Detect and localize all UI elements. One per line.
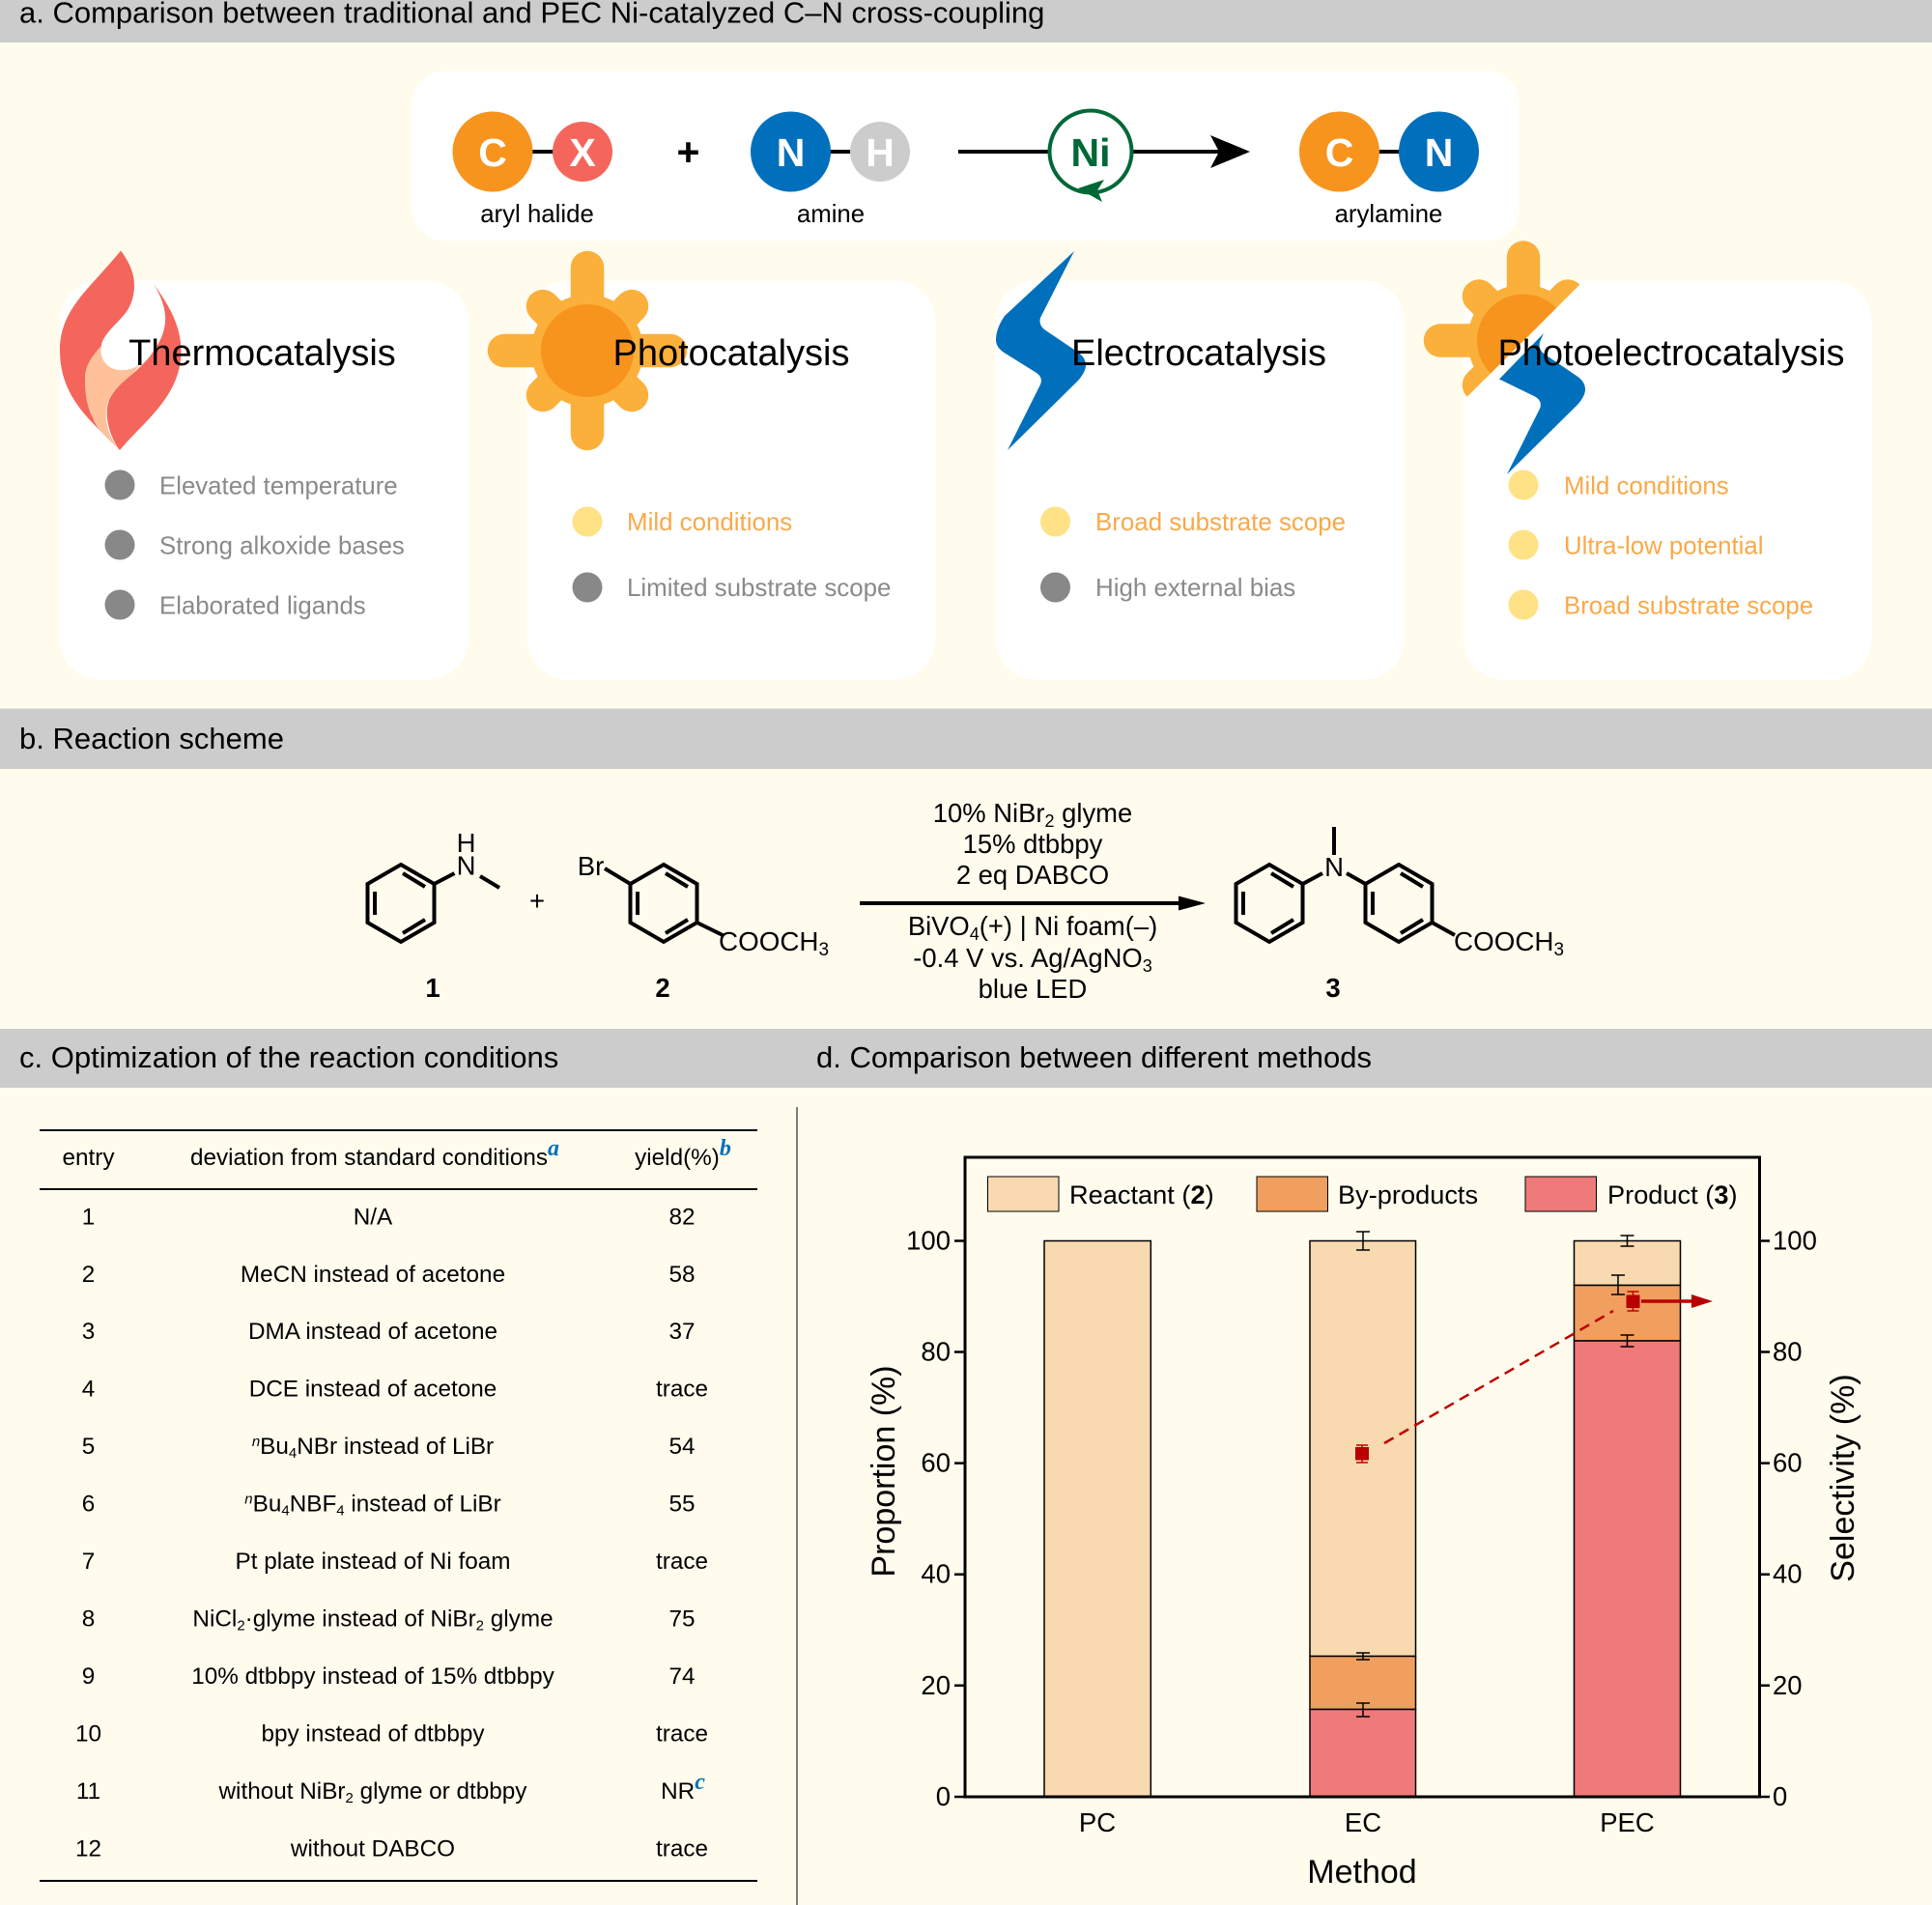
x axis labels: [1079, 1807, 1655, 1837]
table rows: 74: [668, 1663, 696, 1690]
compound 2: 3: [818, 940, 829, 960]
table rows: 5: [82, 1434, 95, 1460]
table rows: 10: [75, 1721, 101, 1747]
header a: [0, 0, 1932, 43]
table rows: trace: [656, 1376, 708, 1403]
table head: [62, 1136, 731, 1171]
reaction arrow and conditions: 10% NiBr: [933, 798, 1045, 828]
compound 3: COOCH: [1454, 926, 1553, 956]
icon: flame: [60, 251, 182, 450]
axes frame: [965, 1157, 1760, 1797]
reaction arrow and conditions: 2 eq DABCO: [956, 860, 1109, 890]
reaction arrow and conditions: 3: [1143, 956, 1152, 976]
compound 2: COOCH: [719, 926, 818, 956]
aryl halide: [452, 112, 612, 228]
right axis labels: 0: [1773, 1781, 1787, 1811]
reaction arrow and conditions: [860, 798, 1206, 1004]
table rows: 8: [82, 1606, 95, 1633]
right axis labels: [1773, 1225, 1817, 1811]
table rows: n: [252, 1434, 260, 1450]
chart: stacked bars with selectivity: [866, 1157, 1861, 1891]
table rows: 9: [82, 1663, 95, 1690]
compound 1: [367, 828, 499, 1003]
table head: yield(%): [635, 1145, 720, 1171]
table rows: 55: [668, 1492, 696, 1517]
table rows: DMA instead of acetone: [248, 1319, 497, 1345]
amine: [751, 112, 910, 228]
table rows: 4: [281, 1503, 290, 1519]
legend: By-products: [1338, 1180, 1478, 1209]
table head: entry: [62, 1145, 115, 1171]
table rows: c: [695, 1770, 705, 1795]
legend: [987, 1177, 1737, 1211]
arrow with Ni catalyst: [958, 110, 1250, 202]
header c and d: [0, 1029, 1932, 1088]
title: Photocatalysis: [612, 333, 850, 374]
title: Photoelectrocatalysis: [1497, 333, 1845, 374]
amine: N: [777, 130, 805, 175]
list: [572, 506, 891, 603]
plus sign: +: [677, 129, 699, 174]
table rows: 12: [75, 1835, 101, 1862]
icon: sun: [504, 268, 670, 434]
list: High external bias: [1095, 575, 1295, 602]
x axis labels: EC: [1345, 1807, 1381, 1837]
left axis labels: 80: [921, 1337, 951, 1366]
aryl halide: aryl halide: [480, 201, 594, 228]
y axis title right: Selectivity (%): [1825, 1374, 1861, 1582]
table head: b: [720, 1136, 731, 1161]
compound 3: [1236, 827, 1564, 1003]
table: optimization: [40, 1130, 757, 1881]
reaction arrow and conditions: (+) | Ni foam(–): [980, 911, 1157, 941]
table rows: 1: [82, 1204, 95, 1231]
table rows: 10% dtbbpy instead of 15% dtbbpy: [191, 1663, 555, 1690]
reaction arrow and conditions: 4: [970, 924, 980, 944]
table rows: without NiBr: [219, 1778, 346, 1805]
table rows: instead of LiBr: [345, 1492, 501, 1517]
list: [1509, 469, 1813, 620]
x axis title: Method: [1307, 1854, 1417, 1891]
aryl halide: X: [569, 130, 596, 175]
table rows: bpy instead of dtbbpy: [261, 1721, 485, 1747]
table rows: trace: [656, 1721, 708, 1747]
list: [104, 469, 405, 620]
right axis labels: 100: [1773, 1225, 1817, 1256]
table rows: DCE instead of acetone: [249, 1376, 497, 1403]
header b: b. Reaction scheme: [19, 722, 284, 755]
arylamine: N: [1425, 130, 1453, 175]
table rows: NiCl: [192, 1606, 237, 1633]
table rows: 37: [668, 1319, 696, 1345]
right axis labels: 80: [1773, 1337, 1803, 1366]
aryl halide: C: [478, 130, 507, 175]
compound 1: H: [457, 828, 475, 858]
table rows: Bu: [253, 1492, 281, 1517]
list: Ultra-low potential: [1564, 532, 1763, 559]
reaction arrow and conditions: 15% dtbbpy: [963, 829, 1103, 859]
list: Limited substrate scope: [627, 575, 891, 602]
left axis labels: 40: [921, 1559, 951, 1589]
title: Electrocatalysis: [1071, 333, 1326, 374]
reaction arrow and conditions: 2: [1045, 811, 1055, 831]
table rows: 3: [82, 1319, 95, 1345]
compound 1: 1: [425, 973, 440, 1003]
table rows: 7: [82, 1549, 95, 1575]
list: Mild conditions: [1564, 472, 1729, 499]
compound 2: 2: [655, 973, 670, 1003]
table rows: 75: [668, 1606, 696, 1633]
title: Thermocatalysis: [128, 333, 396, 374]
compound 1: N: [457, 850, 475, 881]
table rows: glyme or dtbbpy: [354, 1778, 527, 1805]
panel: overall reaction: [412, 71, 1519, 241]
amine: H: [866, 130, 895, 175]
table rows: NBF: [290, 1492, 336, 1517]
ticks: [954, 1240, 1770, 1797]
reaction arrow and conditions: -0.4 V vs. Ag/AgNO: [913, 943, 1143, 973]
table rows: NBr instead of LiBr: [297, 1434, 494, 1460]
y axis title left: Proportion (%): [866, 1365, 902, 1578]
table rows: 2: [346, 1790, 354, 1806]
table rows: trace: [656, 1835, 708, 1862]
table rows: ·glyme instead of NiBr: [245, 1606, 476, 1633]
compound 2: [578, 851, 829, 1003]
table rows: without DABCO: [290, 1835, 455, 1862]
table rows: N/A: [354, 1204, 393, 1231]
right axis labels: 40: [1773, 1559, 1803, 1589]
reaction arrow and conditions: BiVO: [908, 911, 970, 941]
right axis labels: 20: [1773, 1670, 1803, 1700]
left axis labels: 60: [921, 1448, 951, 1478]
left axis labels: 0: [936, 1781, 951, 1811]
table rows: 4: [289, 1445, 297, 1462]
left axis labels: [906, 1225, 951, 1811]
reaction arrow and conditions: glyme: [1055, 798, 1132, 828]
table rows: 2: [82, 1262, 95, 1288]
table head: a: [548, 1136, 559, 1161]
table head: deviation from standard conditions: [190, 1145, 548, 1171]
panel: photoelectrocatalysis: [1440, 257, 1872, 680]
table rows: 11: [76, 1778, 100, 1805]
bars: [1044, 1240, 1681, 1797]
table rows: Bu: [260, 1434, 289, 1460]
header c and d: d. Comparison between different methods: [816, 1040, 1372, 1074]
table rows: 4: [82, 1376, 95, 1403]
compound 2: Br: [578, 851, 604, 881]
reaction scheme: [367, 798, 1564, 1004]
panel: thermocatalysis: [60, 251, 468, 680]
table rows: 4: [336, 1503, 345, 1519]
list: Broad substrate scope: [1095, 509, 1346, 536]
compound 3: 3: [1553, 940, 1564, 960]
plus: +: [529, 886, 545, 916]
compound 3: 3: [1325, 973, 1341, 1003]
panel: electrocatalysis: [996, 251, 1405, 680]
amine: amine: [797, 201, 865, 228]
right axis labels: 60: [1773, 1448, 1803, 1478]
compound 3: N: [1324, 852, 1344, 882]
table rows: [75, 1204, 708, 1862]
x axis labels: PC: [1079, 1807, 1116, 1837]
table rows: glyme: [484, 1606, 554, 1633]
table rows: Pt plate instead of Ni foam: [236, 1549, 510, 1575]
table rows: 54: [668, 1434, 696, 1460]
panel: photocatalysis: [504, 268, 935, 680]
list: Strong alkoxide bases: [159, 532, 405, 559]
selectivity line: [1355, 1292, 1713, 1463]
table rows: MeCN instead of acetone: [241, 1262, 505, 1288]
list: Elevated temperature: [159, 472, 398, 499]
table rows: 58: [668, 1262, 696, 1288]
table rows: n: [244, 1492, 253, 1507]
header c and d: c. Optimization of the reaction conditions: [19, 1040, 558, 1074]
list: Mild conditions: [627, 509, 792, 536]
table rows: 2: [237, 1617, 245, 1635]
table rows: trace: [656, 1549, 708, 1575]
arylamine: C: [1325, 130, 1353, 175]
icon: half sun half bolt: [1440, 257, 1606, 474]
arylamine: [1299, 112, 1479, 228]
table rows: 82: [668, 1204, 696, 1231]
list: Broad substrate scope: [1564, 592, 1813, 619]
header b: [0, 709, 1932, 769]
icon: lightning bolt: [996, 251, 1086, 450]
table rows: 6: [82, 1492, 95, 1517]
list: [1040, 506, 1346, 603]
left axis labels: 20: [921, 1670, 951, 1700]
left axis labels: 100: [906, 1225, 951, 1256]
list: Elaborated ligands: [159, 592, 366, 619]
legend: Reactant (2): [1069, 1180, 1214, 1209]
table rows: NR: [661, 1778, 695, 1805]
arrow with Ni catalyst: Ni: [1070, 130, 1111, 175]
error bars: [1356, 1232, 1634, 1717]
x axis labels: PEC: [1600, 1807, 1655, 1837]
legend: Product (3): [1607, 1180, 1737, 1209]
arylamine: arylamine: [1335, 201, 1442, 228]
table rows: 2: [476, 1617, 484, 1635]
reaction arrow and conditions: blue LED: [979, 974, 1087, 1004]
